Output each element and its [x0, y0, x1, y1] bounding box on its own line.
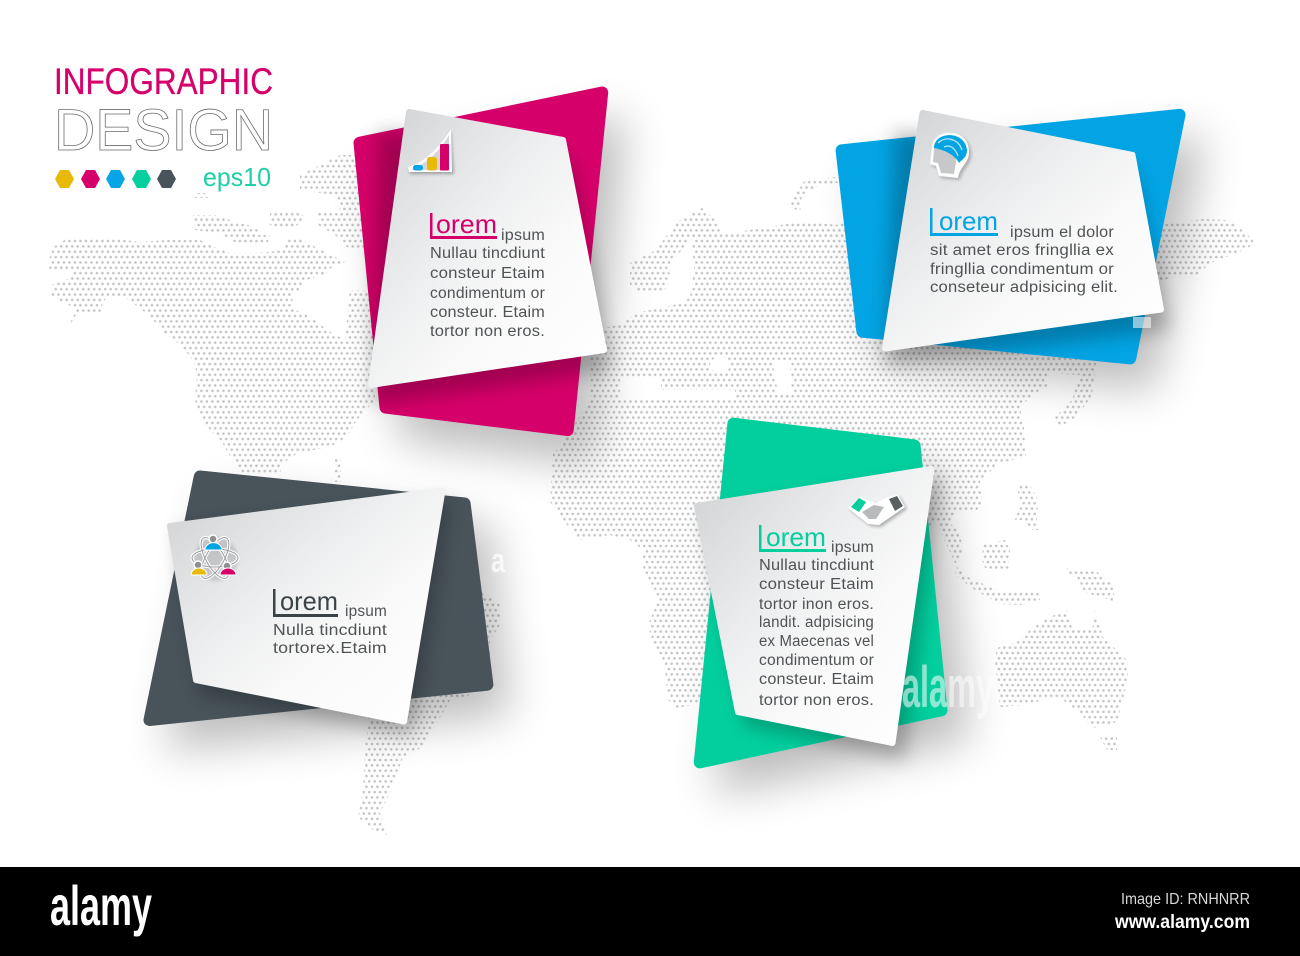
text block: Nullau tincdiunt [430, 245, 546, 262]
heading: lorem: orem [766, 522, 826, 552]
text block: ipsum [501, 227, 545, 244]
white sheet [170, 490, 442, 722]
colour hexagons [55, 170, 176, 188]
heading: lorem: L [929, 225, 936, 239]
heading: lorem: L [758, 541, 765, 555]
text block: consteur Etaim [759, 576, 874, 593]
text block: sit amet eros fringllia ex [930, 242, 1114, 259]
text block: Nullau tincdiunt [759, 557, 875, 574]
text block: tortor non eros. [430, 323, 545, 340]
text block: Nulla tincdiunt [273, 622, 388, 639]
footer bar [0, 867, 1300, 956]
text block: conseteur adpisicing elit. [930, 279, 1118, 296]
text block [272, 586, 388, 657]
dark backing sheet [150, 476, 487, 720]
heading: lorem: orem [939, 206, 998, 236]
heading: lorem: L [272, 606, 279, 620]
text block: fringllia condimentum or [930, 261, 1114, 278]
heading: design: DESIGN [54, 98, 273, 163]
faint watermarks: alamy [902, 655, 994, 720]
text block [929, 206, 1118, 296]
logo: alamy: alamy [50, 874, 152, 937]
panel: blue card [842, 113, 1205, 390]
heading: infographic: INFOGRAPHIC [54, 61, 273, 102]
faint watermarks: a [491, 542, 506, 580]
heading: lorem: orem [436, 209, 497, 239]
dotted world map [48, 155, 1254, 834]
heading: lorem: L [429, 228, 436, 242]
text block: consteur Etaim [430, 265, 545, 282]
label: eps10: eps10 [203, 162, 271, 192]
green backing sheet [700, 424, 942, 762]
blue backing sheet [842, 115, 1180, 358]
text block [429, 209, 546, 340]
icon: handshake [848, 495, 907, 527]
text block: ipsum [831, 539, 874, 556]
icon: bar chart [408, 129, 454, 174]
heading: lorem: orem [280, 586, 338, 616]
text block: condimentum or [759, 652, 874, 669]
text block: landit. adpisicing [759, 614, 874, 631]
white sheet [697, 469, 932, 743]
icon: head with brain [930, 132, 971, 180]
website: www.alamy.com [1114, 912, 1250, 933]
text block: tortor inon eros. [759, 596, 874, 613]
text block: tortorex.Etaim [273, 640, 387, 657]
faint watermarks [491, 317, 1151, 720]
text block: ipsum [345, 603, 387, 620]
white sheet [371, 112, 604, 385]
text block [758, 522, 875, 709]
panel: dark grey card [150, 476, 510, 750]
text block: ex Maecenas vel [759, 633, 874, 650]
text block: condimentum or [430, 285, 545, 302]
text block: consteur. Etaim [759, 671, 874, 688]
panel: pink card [360, 92, 625, 465]
text block: consteur. Etaim [430, 304, 545, 321]
icon: atom with people [191, 534, 238, 582]
pink backing sheet [360, 92, 602, 430]
image id: Image ID: RNHNRR [1121, 891, 1250, 908]
panel: green card [697, 424, 970, 795]
text block: tortor non eros. [759, 692, 874, 709]
title block [54, 61, 273, 192]
text block: ipsum el dolor [1010, 224, 1114, 241]
white sheet [885, 113, 1161, 348]
